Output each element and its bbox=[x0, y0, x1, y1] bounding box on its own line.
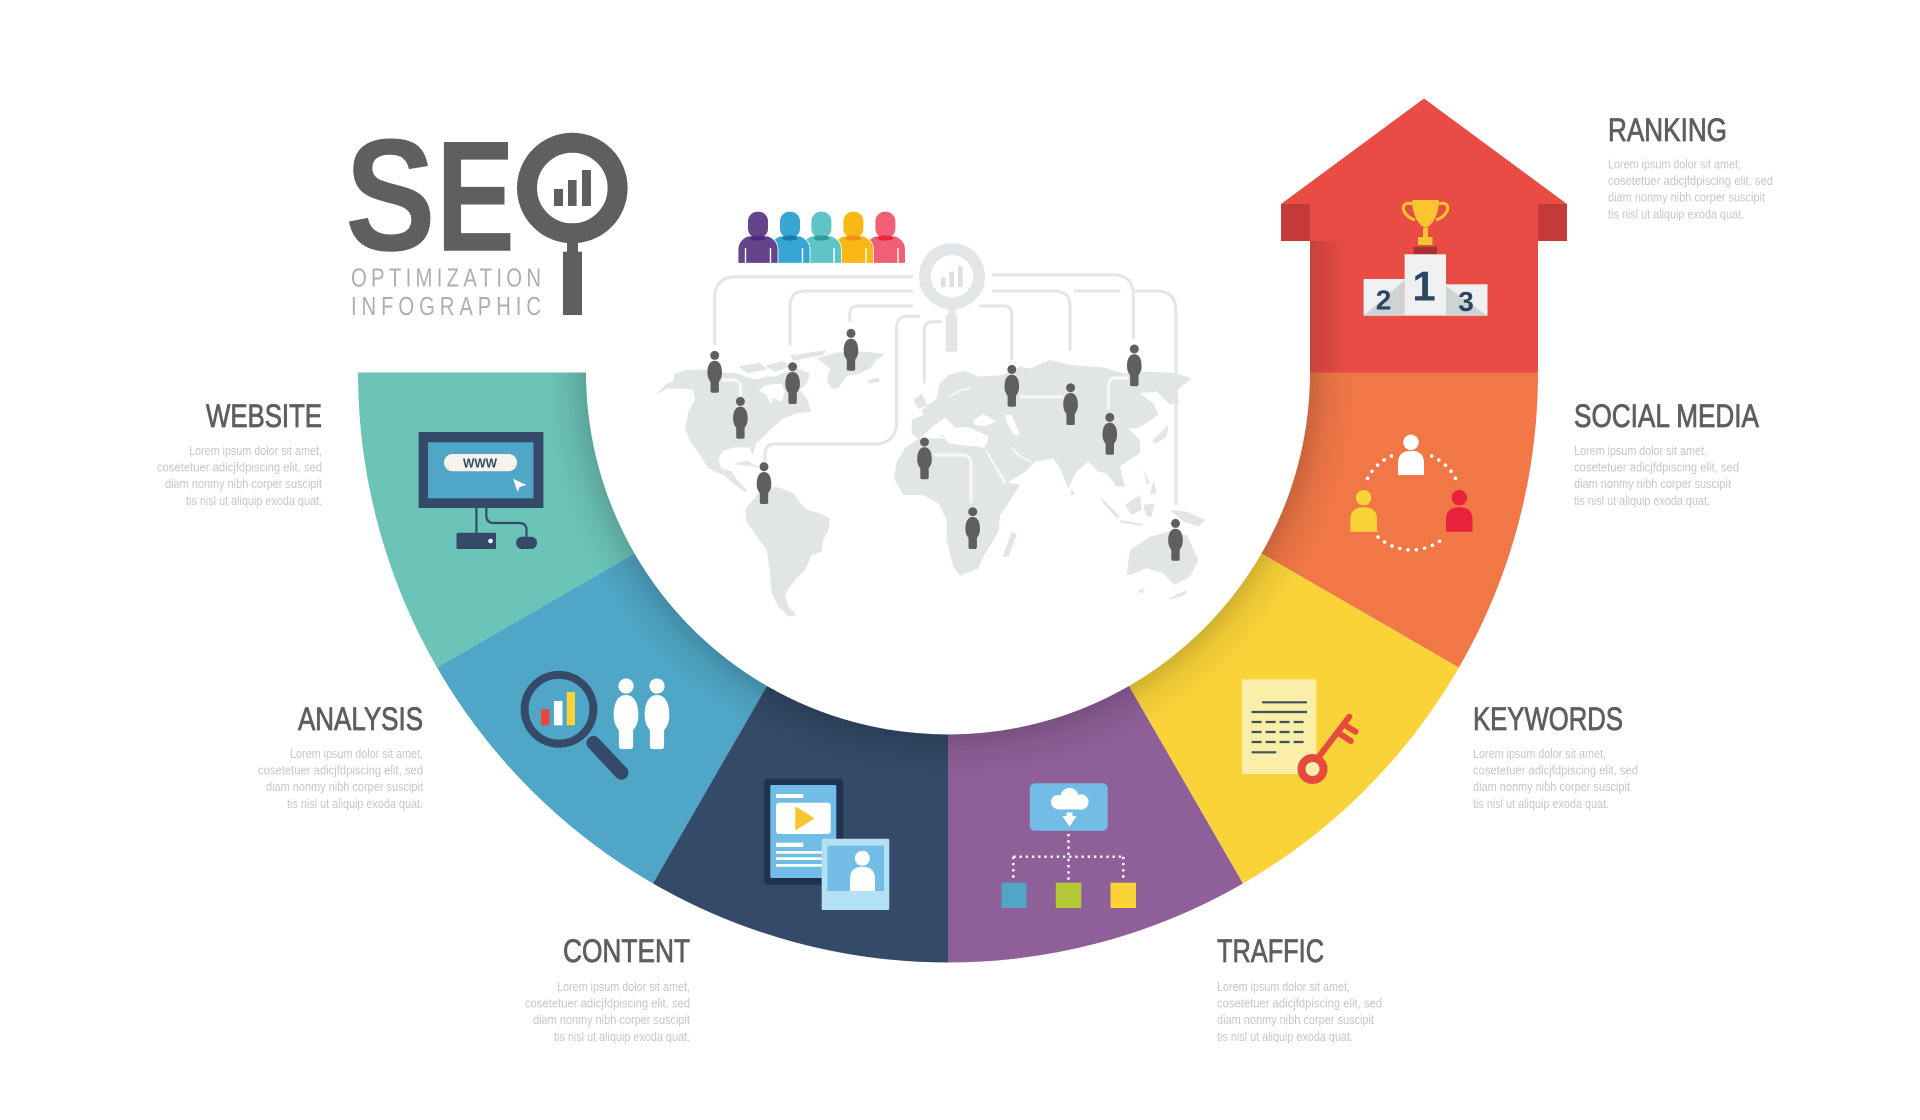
text: traffic body: diam nonmy nibh corper suscipit bbox=[1217, 1013, 1374, 1027]
text: keywords body: Lorem ipsum dolor sit amet, bbox=[1473, 747, 1606, 761]
person 8 bbox=[1004, 365, 1019, 407]
java bbox=[1120, 520, 1143, 526]
text: ranking body: tis nisl ut aliquip exoda quat. bbox=[1608, 207, 1744, 221]
heading: traffic: TRAFFIC bbox=[1217, 933, 1324, 969]
line to north america 1 bbox=[715, 277, 913, 345]
borneo bbox=[1125, 495, 1142, 515]
text: keywords body: diam nonmy nibh corper suscipit bbox=[1473, 780, 1630, 794]
label: analysis bbox=[258, 701, 423, 811]
inner shadow of arc bbox=[543, 372, 1353, 778]
link europe to asia bbox=[1020, 395, 1063, 398]
sri lanka bbox=[1070, 488, 1075, 495]
text: traffic body: Lorem ipsum dolor sit amet, bbox=[1217, 980, 1350, 994]
baja channel bbox=[692, 445, 698, 459]
text: ranking body: diam nonmy nibh corper suscipit bbox=[1608, 191, 1765, 205]
link between north america people bbox=[722, 380, 740, 397]
person 5 bbox=[757, 462, 771, 504]
madagascar bbox=[1003, 532, 1017, 557]
person pink bbox=[865, 212, 905, 263]
letter S: S bbox=[345, 105, 436, 284]
hudson bay bbox=[758, 383, 785, 404]
line to europe bbox=[979, 306, 1012, 360]
person 10 bbox=[1127, 344, 1142, 386]
text: analysis body: tis nisl ut aliquip exoda quat. bbox=[287, 797, 423, 811]
link china to russia bbox=[1109, 378, 1128, 410]
cuba bbox=[733, 461, 760, 467]
icon: keywords document and key bbox=[1242, 679, 1356, 780]
text: analysis body: cosetetuer adicjfdpiscing elit, sed bbox=[258, 764, 423, 778]
caspian sea bbox=[1005, 415, 1020, 435]
icon: computer website bbox=[419, 432, 543, 549]
icon: traffic cloud network bbox=[1002, 783, 1136, 908]
heading: social media: SOCIAL MEDIA bbox=[1574, 398, 1760, 434]
tasmania and new zealand bbox=[1138, 588, 1187, 599]
text: website body: cosetetuer adicjfdpiscing elit, sed bbox=[157, 461, 322, 475]
segment: traffic bbox=[948, 686, 1243, 962]
text: content body: tis nisl ut aliquip exoda quat. bbox=[554, 1030, 690, 1044]
stray segment bbox=[1074, 290, 1120, 292]
label: ranking bbox=[1608, 112, 1773, 221]
text: content body: Lorem ipsum dolor sit amet, bbox=[557, 980, 690, 994]
text: website body: Lorem ipsum dolor sit amet, bbox=[189, 444, 322, 458]
text: social media body: Lorem ipsum dolor sit amet, bbox=[1574, 444, 1707, 458]
map link lines bbox=[722, 378, 1128, 503]
text: analysis body: Lorem ipsum dolor sit amet, bbox=[290, 747, 423, 761]
segment: social media bbox=[1262, 372, 1538, 668]
eurasia bbox=[912, 360, 1192, 488]
text: ranking body: cosetetuer adicjfdpiscing elit, sed bbox=[1608, 174, 1773, 188]
icon: ranking podium and trophy: 1 bbox=[1412, 263, 1436, 310]
segment: website bbox=[358, 372, 634, 668]
text: ranking body: Lorem ipsum dolor sit amet, bbox=[1608, 158, 1741, 172]
label: content bbox=[525, 933, 690, 1044]
person 12 bbox=[1168, 519, 1183, 561]
iceland bbox=[867, 377, 880, 383]
north america bbox=[655, 368, 812, 493]
curved arrow diagram bbox=[358, 98, 1567, 962]
text: ranking body bbox=[1608, 158, 1773, 221]
person 6 bbox=[917, 438, 932, 479]
segment: keywords bbox=[1129, 554, 1459, 883]
SEO logo bbox=[345, 105, 618, 321]
person 9 bbox=[1063, 383, 1078, 425]
heading: website: WEBSITE bbox=[206, 398, 322, 434]
text: keywords body: cosetetuer adicjfdpiscing elit, sed bbox=[1473, 764, 1638, 778]
segment: analysis bbox=[437, 554, 767, 883]
text: keywords body: tis nisl ut aliquip exoda quat. bbox=[1473, 797, 1609, 811]
icon: ranking podium and trophy: 2 bbox=[1376, 284, 1391, 315]
person blue bbox=[770, 212, 810, 263]
label: keywords bbox=[1473, 701, 1638, 811]
icon: content tablet and photo bbox=[764, 779, 889, 910]
afro-eurasia and oceania bbox=[894, 360, 1205, 599]
text: website body: tis nisl ut aliquip exoda quat. bbox=[186, 494, 322, 508]
text: content body: diam nonmy nibh corper suscipit bbox=[533, 1013, 690, 1027]
text: content body: cosetetuer adicjfdpiscing elit, sed bbox=[525, 997, 690, 1011]
sulawesi bbox=[1143, 503, 1155, 517]
text: content body bbox=[525, 980, 690, 1044]
person 7 bbox=[965, 507, 980, 549]
text: traffic body: tis nisl ut aliquip exoda quat. bbox=[1217, 1030, 1353, 1044]
subtitle line 2: INFOGRAPHIC bbox=[351, 292, 541, 321]
text: traffic body: cosetetuer adicjfdpiscing elit, sed bbox=[1217, 997, 1382, 1011]
map people markers bbox=[707, 329, 1183, 561]
label: website bbox=[157, 398, 322, 508]
heading: content: CONTENT bbox=[563, 933, 690, 969]
person 1 bbox=[707, 351, 722, 393]
line to australia bbox=[1135, 291, 1176, 505]
person 2 bbox=[733, 397, 748, 439]
text: website body: diam nonmy nibh corper suscipit bbox=[165, 477, 322, 491]
greenland bbox=[817, 352, 885, 388]
line to west africa bbox=[924, 322, 942, 383]
heading: ranking: RANKING bbox=[1608, 112, 1727, 148]
arrow right wing shade bbox=[1538, 204, 1567, 241]
arrow shaft shadow bbox=[1310, 241, 1350, 372]
segment: content bbox=[653, 686, 948, 962]
person purple bbox=[738, 212, 778, 263]
icon: ranking podium and trophy: 3 bbox=[1458, 286, 1474, 317]
text: website body bbox=[157, 444, 322, 508]
person teal bbox=[801, 212, 841, 263]
australia bbox=[1127, 532, 1198, 585]
central magnifier bbox=[925, 249, 979, 352]
sumatra bbox=[1100, 497, 1120, 518]
magnifier O bbox=[527, 143, 618, 315]
line to russia east bbox=[992, 275, 1134, 339]
heading: keywords: KEYWORDS bbox=[1473, 701, 1623, 737]
americas bbox=[655, 350, 885, 617]
segment: ranking arrow head bbox=[1281, 98, 1567, 372]
text: keywords body bbox=[1473, 747, 1638, 811]
red sea, gulf, baltic bbox=[948, 388, 1032, 483]
heading: analysis: ANALYSIS bbox=[298, 701, 423, 737]
text: social media body: cosetetuer adicjfdpiscing elit, sed bbox=[1574, 461, 1739, 475]
subtitle line 1: OPTIMIZATION bbox=[351, 263, 541, 292]
person 11 bbox=[1102, 413, 1117, 455]
label: traffic bbox=[1217, 933, 1382, 1044]
text: social media body: tis nisl ut aliquip exoda quat. bbox=[1574, 494, 1710, 508]
person yellow bbox=[833, 212, 873, 263]
person 3 bbox=[785, 362, 800, 404]
icon: ranking podium and trophy bbox=[1364, 200, 1488, 317]
letter E: E bbox=[436, 109, 515, 285]
label: social media bbox=[1574, 398, 1760, 508]
text: analysis body bbox=[258, 747, 423, 811]
new guinea bbox=[1170, 510, 1205, 527]
text: analysis body: diam nonmy nibh corper suscipit bbox=[266, 780, 423, 794]
text: social media body bbox=[1574, 444, 1739, 508]
africa bbox=[894, 438, 1020, 576]
arctic islands bbox=[738, 350, 827, 373]
icon: computer website: WWW bbox=[463, 457, 497, 471]
line to north america 2 bbox=[790, 291, 913, 345]
mediterranean bbox=[923, 417, 988, 446]
arrow left wing shade bbox=[1281, 204, 1310, 241]
coloured people group bbox=[738, 212, 905, 263]
line to latin america bbox=[765, 316, 920, 462]
black sea bbox=[973, 414, 996, 426]
world map bbox=[655, 350, 1205, 617]
text: traffic body bbox=[1217, 980, 1382, 1044]
person 4 bbox=[844, 329, 858, 371]
icon: analysis magnifier and people bbox=[525, 675, 669, 773]
text: social media body: diam nonmy nibh corper suscipit bbox=[1574, 477, 1731, 491]
icon: social media circle bbox=[1350, 435, 1472, 550]
south america bbox=[745, 487, 830, 617]
connector lines bbox=[715, 275, 1176, 505]
japan bbox=[1153, 425, 1168, 444]
line to central asia bbox=[992, 291, 1070, 351]
britain bbox=[913, 393, 927, 409]
philippines bbox=[1143, 470, 1157, 495]
link west africa to south africa bbox=[934, 455, 971, 503]
line to greenland bbox=[850, 306, 913, 322]
